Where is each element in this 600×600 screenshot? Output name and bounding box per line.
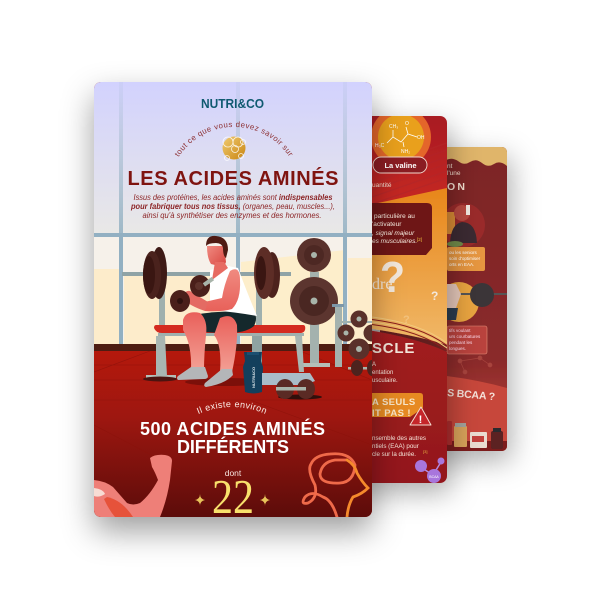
callout: courbatures: longues. [449, 346, 466, 351]
text: heading fragment [447, 164, 464, 190]
stripes [372, 317, 447, 350]
label: La valine [373, 157, 427, 173]
intro text [130, 193, 335, 220]
icon: valine molecule: OH [417, 135, 425, 141]
icon: amino acid ball [222, 136, 246, 160]
logo: NUTRI&CO [201, 97, 264, 111]
text: muscle description [372, 362, 398, 384]
dumbbells [170, 290, 190, 312]
intro text: ainsi qu'à synthétiser des enzymes et des hormones. [142, 211, 322, 220]
molecule pattern [458, 356, 492, 374]
text: DIFFÉRENTS [177, 436, 289, 457]
orange section [372, 188, 468, 356]
callout: leucine: es musculaires. [372, 238, 417, 245]
icon: valine molecule: CH₃ [389, 124, 398, 130]
text: EAA [372, 436, 428, 456]
forearm [183, 291, 208, 311]
illustration: flexed arm [94, 455, 172, 517]
icon: BCAA molecule [415, 458, 444, 483]
icon: warning [410, 407, 431, 426]
callout: seuls: A SEULS [372, 397, 416, 408]
icon: warning: ! [419, 414, 422, 426]
heading: 500 acides aminés: 500 ACIDES AMINÉS [140, 418, 325, 439]
window frame top, faded [119, 82, 347, 234]
text: il existe environ: Il existe environ [196, 402, 266, 414]
icon: question marks [382, 262, 438, 323]
head [207, 246, 226, 266]
shoes [177, 367, 208, 380]
icon: BCAA molecule: BCAA [429, 475, 439, 479]
callout: seniors [447, 247, 485, 271]
illustration: bench [154, 325, 305, 376]
icon: valine molecule: O [405, 121, 409, 127]
illustration: amino acid chain ribbon [303, 454, 368, 517]
text: EAA: nsemble des autres [372, 435, 426, 442]
illustration: weight rack [122, 247, 291, 382]
callout: seniors: ou les seniors [449, 250, 478, 255]
header sky background [94, 82, 372, 234]
illustration: shaker bottle: NUTRI&CO [251, 367, 256, 388]
band: BCAA [447, 376, 507, 451]
text: curved intro: tout ce que vous devez savoir sur [174, 121, 292, 156]
text: EAA: ntiels (EAA) pour [372, 443, 419, 450]
neck and torso skin [212, 262, 228, 280]
text: dont: dont [225, 468, 242, 478]
text: heading fragment: nt [447, 163, 453, 170]
text: EAA: [3] [423, 449, 427, 454]
text: quantité: uantité [372, 182, 392, 189]
callout: seuls: IT PAS ! [372, 408, 411, 419]
text: muscle description: A [372, 362, 376, 368]
intro text: Issus des protéines, les acides aminés sont indispensables [134, 193, 333, 202]
title: LES ACIDES AMINÉS [128, 167, 338, 190]
callout: courbatures: tifs voulant [449, 328, 471, 333]
callout: leucine: [2] [417, 237, 422, 242]
icon: question marks: ? [403, 314, 410, 326]
text: heading fragment: ON [447, 181, 465, 193]
card: front page [94, 82, 372, 517]
illustration: weight plates stand [290, 238, 374, 367]
heading: MUSCLE: SCLE [372, 340, 415, 357]
heading: BCAA: S BCAA ? [447, 387, 496, 403]
number: 22: 22 [212, 469, 254, 524]
illustration: small dumbbell stack [338, 310, 380, 376]
text: muscle description: entation [372, 370, 393, 376]
shorter leg [214, 316, 237, 372]
scalloped header [447, 147, 507, 166]
tank top [210, 266, 257, 316]
products [447, 421, 507, 451]
text: dre: dre [372, 276, 392, 293]
text: muscle description: usculaire. [372, 378, 398, 384]
illustration: floor dumbbells [262, 373, 322, 400]
illustration: man eating [447, 203, 485, 247]
intro text: pour fabriquer tous nos tissus, (organes, peau, muscles...), [130, 202, 335, 211]
stripes: red background [372, 180, 440, 203]
callout: leucine [372, 203, 432, 255]
window frame [94, 233, 372, 346]
shadow [185, 378, 265, 386]
illustration: athlete [170, 236, 265, 387]
callout: seuls [372, 393, 423, 419]
leg [183, 312, 206, 370]
label: La valine: La valine [384, 161, 417, 170]
illustration: athlete lifting [447, 282, 507, 322]
floor [94, 351, 372, 517]
callout: leucine: 'activateur [372, 221, 402, 228]
callout: courbatures: urs courbatures [449, 334, 481, 339]
icon: question marks: ? [431, 289, 438, 303]
callout: seniors: soin d'optimiser [449, 256, 481, 261]
card: back page (BCAA) [380, 147, 507, 451]
upper arm [200, 269, 240, 311]
callout: leucine: particulière au [374, 213, 415, 220]
icon: valine molecule: NH₂ [401, 149, 410, 155]
illustration: shaker bottle [243, 352, 263, 394]
number: 22 [195, 469, 270, 524]
text: heading fragment: l'une [447, 170, 461, 177]
callout: courbatures [447, 326, 487, 354]
card: middle page (valine) [372, 109, 468, 510]
callout: seniors: orts en EAA. [449, 262, 474, 267]
icon: valine molecule: H₃C [375, 143, 385, 149]
icon: question marks: ? [380, 253, 405, 302]
shorts [194, 311, 256, 333]
window wall [94, 234, 372, 346]
dark red section [372, 329, 468, 510]
callout: courbatures: pendant les [449, 340, 473, 345]
callout: leucine: , signal majeur [372, 230, 415, 237]
text: EAA: cle sur la durée. [372, 451, 416, 458]
icon: valine molecule [372, 116, 431, 158]
